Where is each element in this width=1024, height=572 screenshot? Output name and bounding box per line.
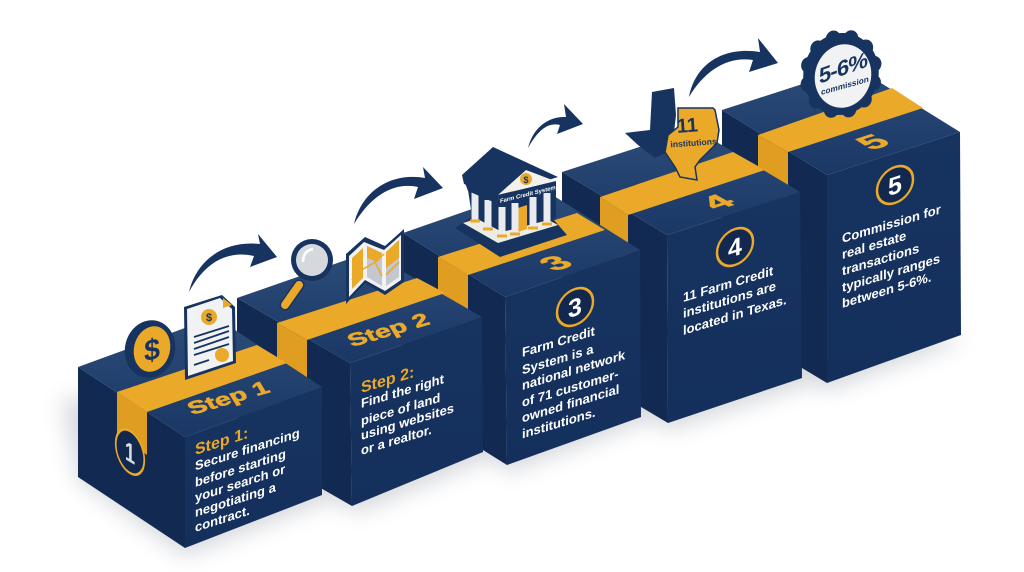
Texas label: 11 — [676, 114, 699, 138]
badge label: 5-6% — [819, 46, 868, 89]
step 4 top number: 4 — [692, 190, 744, 214]
step 5 text: real estate — [842, 228, 906, 262]
step 3 block — [403, 186, 641, 465]
step 5 text: typically ranges — [842, 251, 940, 295]
icon: commission badge — [794, 24, 888, 124]
columns — [475, 192, 547, 235]
step 3 text: of 71 customer- — [522, 366, 619, 410]
step 4 text: institutions are — [683, 278, 776, 321]
bank label: Farm Credit System — [500, 185, 556, 205]
step 3 text: institutions. — [522, 405, 596, 441]
icon: dollar coin — [119, 315, 181, 383]
step 3 number circle: 3 — [568, 292, 582, 324]
step 1 text: Step 1: — [195, 424, 248, 459]
step 5 text: Commission for — [842, 202, 941, 246]
step 1 block — [78, 317, 322, 548]
icon: dollar coin: $ — [144, 332, 160, 369]
bank base — [455, 204, 567, 257]
arrow: step 4 to step 5 — [689, 38, 778, 97]
step 1 text: your search or — [195, 461, 285, 505]
step 1 text: contract. — [195, 503, 250, 535]
Texas label — [668, 113, 717, 149]
step 2 text: Step 2: — [361, 363, 414, 397]
icon: magnifying glass — [285, 239, 333, 305]
step 3 text: national network — [522, 347, 626, 393]
icon: Farm Credit System bank: $ — [523, 175, 529, 185]
icon: Farm Credit System bank — [455, 147, 567, 257]
step 1 number circle: 1 — [125, 436, 135, 472]
step 1 text: negotiating a — [195, 479, 276, 520]
step 2 text: Find the right — [361, 371, 444, 411]
arrow: step 2 to step 3 — [354, 167, 443, 224]
step 3 top number: 3 — [530, 251, 581, 275]
Texas label: institutions — [670, 136, 717, 149]
bank roof — [462, 147, 558, 196]
step 3 text: owned financial — [522, 382, 619, 425]
step 2 block — [237, 252, 483, 506]
step 4 number circle — [717, 223, 753, 271]
step 3 text: System is a — [522, 341, 594, 377]
step 4 block — [562, 129, 802, 423]
step 1 text: Secure financing — [195, 425, 300, 473]
step 1 number circle — [116, 423, 144, 481]
badge label: commission — [821, 74, 869, 97]
step 2 text: or a realtor. — [361, 422, 432, 458]
step 1 top label: Step 1 — [184, 378, 274, 419]
step 5 number circle: 5 — [888, 170, 902, 202]
step 4 number circle: 4 — [728, 232, 743, 264]
step 5 number circle — [877, 161, 913, 209]
step 3 number circle — [557, 283, 593, 331]
icon: financing document — [184, 295, 236, 380]
icon: folded map — [346, 229, 404, 304]
icon: Texas map — [625, 88, 719, 180]
icon: financing document: $ — [206, 312, 212, 324]
step 5 block — [722, 67, 961, 383]
step 4 text: located in Texas. — [683, 292, 787, 338]
step 4 text: 11 Farm Credit — [683, 263, 774, 305]
step 5 text: between 5-6%. — [842, 269, 931, 311]
arrow: step 1 to step 2 — [189, 234, 277, 292]
step 2 text: piece of land — [361, 390, 440, 428]
step 2 text: using websites — [361, 400, 454, 443]
step 5 text: transactions — [842, 241, 919, 278]
bank back wall — [468, 190, 556, 232]
step 5 top number: 5 — [847, 130, 898, 154]
arrow: step 3 to step 4 — [528, 104, 583, 148]
step 1 text: before starting — [195, 446, 286, 490]
step 3 text: Farm Credit — [522, 323, 595, 360]
step 2 top label: Step 2 — [344, 310, 434, 351]
soft ground shadow — [62, 300, 965, 556]
